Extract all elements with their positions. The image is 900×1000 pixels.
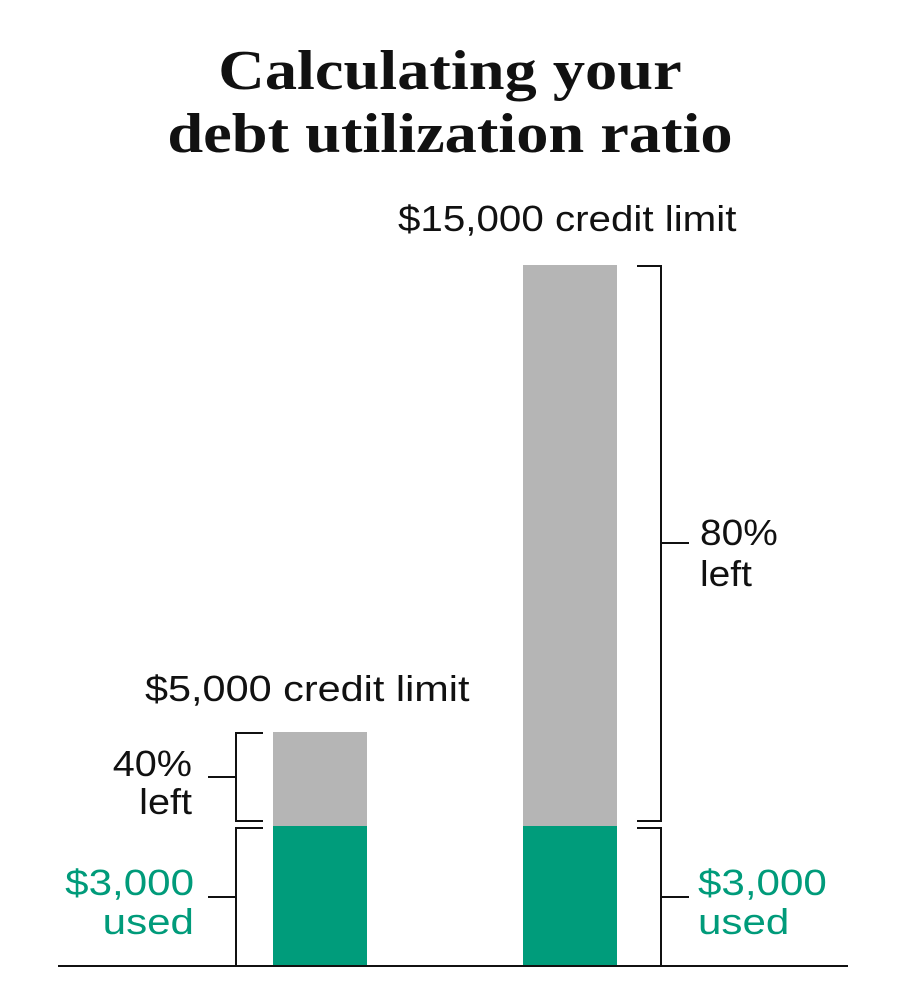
- label: $5,000 credit limit: $5,000 credit limit: [145, 668, 469, 709]
- label: right $3,000 used: $3,000: [698, 862, 827, 903]
- bracket: 40% left: [208, 733, 263, 821]
- title: Calculating your: [218, 40, 682, 102]
- bar: $15,000 limit: [523, 265, 617, 966]
- label: left $3,000 used: used: [103, 901, 194, 942]
- bar: $5,000 limit: [273, 732, 367, 966]
- bracket: right used: [637, 828, 689, 966]
- label: 80% left: left: [700, 553, 752, 594]
- title: debt utilization ratio: [167, 103, 733, 165]
- label: 80% left: [700, 512, 778, 594]
- label: $15,000 credit limit: $15,000 credit limit: [398, 198, 736, 239]
- label: right $3,000 used: [698, 862, 827, 942]
- label: 40% left: left: [139, 781, 192, 822]
- label: 80% left: 80%: [700, 512, 778, 553]
- label: left $3,000 used: $3,000: [65, 862, 194, 903]
- baseline: [58, 965, 848, 967]
- label: 40% left: 40%: [113, 743, 192, 784]
- bracket: 80% left: [637, 266, 689, 821]
- label: 40% left: [113, 743, 192, 822]
- title: [167, 40, 733, 165]
- label: right $3,000 used: used: [698, 901, 789, 942]
- label: left $3,000 used: [65, 862, 194, 942]
- bracket: left used: [208, 828, 263, 966]
